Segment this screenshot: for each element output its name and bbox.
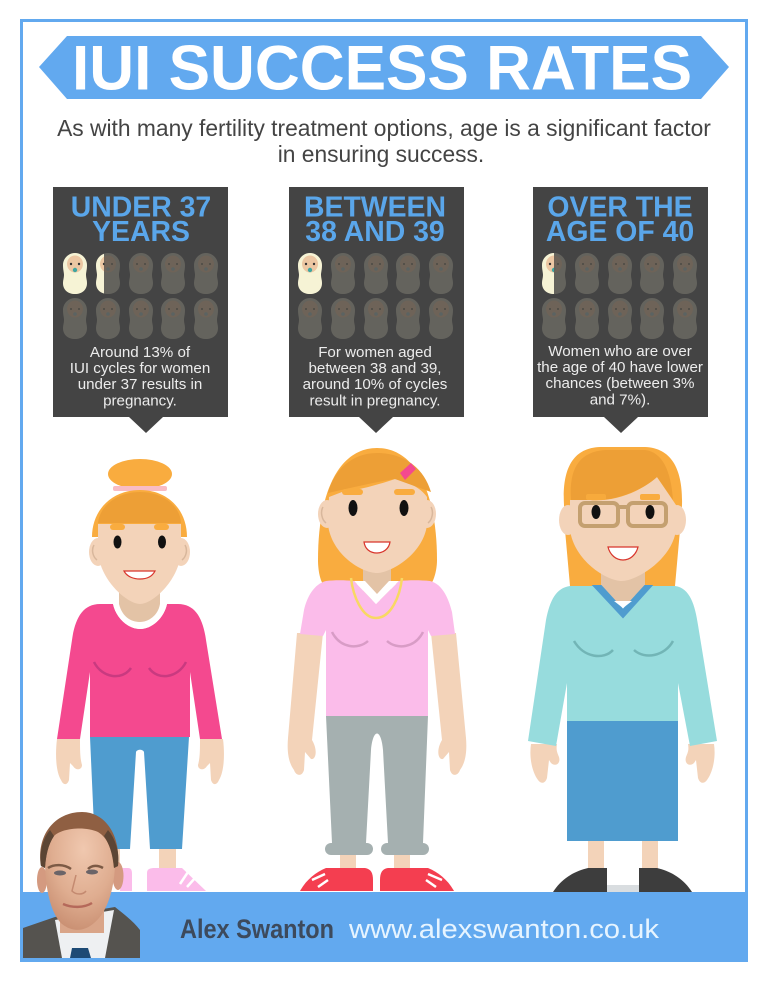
text: under 37 description: pregnancy. (103, 392, 177, 410)
heading: between 38 and 39: 38 AND 39 (305, 216, 445, 248)
text: under 37 description (70, 344, 210, 410)
text: over 40 description: and 7%). (590, 392, 650, 408)
text: over 40 description: Women who are over (548, 343, 692, 360)
text: under 37 description: IUI cycles for women (70, 360, 210, 377)
icon grid: babies 0.5 of 10 (542, 253, 697, 339)
heading: over the age of 40 (546, 192, 694, 248)
author name: Alex Swanton (180, 914, 334, 944)
figure: woman under 37 (56, 459, 224, 891)
text: over 40 description: the age of 40 have lower (537, 359, 703, 376)
heading: over the age of 40: AGE OF 40 (546, 216, 694, 248)
heading: between 38 and 39 (304, 192, 446, 248)
panel: over the age of 40 (533, 187, 708, 433)
panel: between 38 and 39 (289, 187, 464, 433)
heading: under 37 years (71, 192, 211, 248)
figure: woman aged 38 to 39 (288, 448, 466, 891)
icon grid: babies 1 of 10 (298, 253, 453, 339)
text: 38 to 39 description: around 10% of cycles (303, 376, 448, 393)
panel: under 37 years (53, 187, 228, 433)
subtitle (57, 115, 711, 167)
footer bar (20, 892, 748, 961)
text: 38 to 39 description: For women aged (318, 344, 432, 361)
author photo (23, 812, 140, 958)
title banner: IUI SUCCESS RATES (72, 34, 692, 104)
text: over 40 description: chances (between 3% (546, 375, 694, 392)
text: 38 to 39 description: between 38 and 39, (308, 360, 442, 377)
website url: www.alexswanton.co.uk (348, 914, 660, 944)
text: 38 to 39 description (303, 344, 448, 410)
text: 38 to 39 description: result in pregnancy. (309, 392, 441, 410)
text: over 40 description (537, 343, 703, 408)
subtitle: As with many fertility treatment options, age is a significant factor (57, 115, 711, 141)
text: under 37 description: under 37 results in (78, 376, 202, 393)
heading: between 38 and 39: BETWEEN (304, 192, 446, 224)
icon grid: babies 1.3 of 10 (63, 253, 218, 339)
text: under 37 description: Around 13% of (90, 344, 191, 361)
heading: under 37 years: UNDER 37 (71, 192, 211, 224)
heading: under 37 years: YEARS (92, 216, 190, 248)
subtitle: in ensuring success. (278, 141, 484, 167)
figure: woman over 40 (528, 447, 717, 893)
heading: over the age of 40: OVER THE (547, 192, 693, 224)
